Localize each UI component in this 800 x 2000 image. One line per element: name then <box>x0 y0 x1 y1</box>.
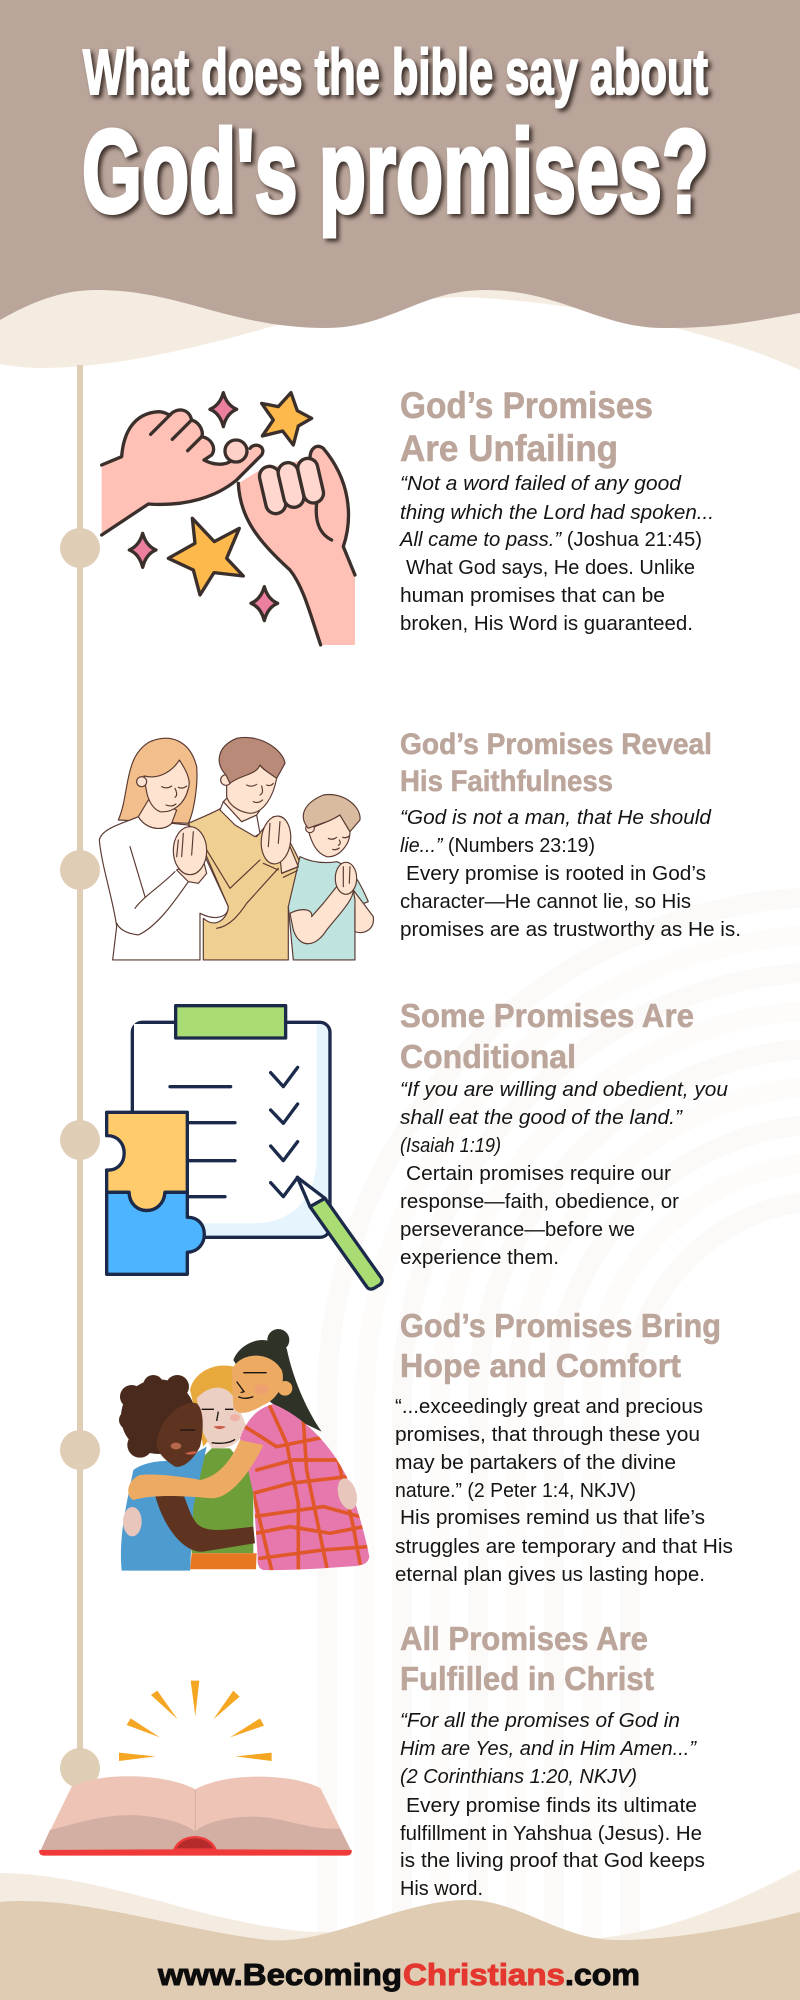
section 1 text: human promises that can be <box>400 585 665 607</box>
section 5 text: Every promise finds its ultimate <box>406 1795 697 1817</box>
section 3 text: perseverance—before we <box>400 1219 635 1241</box>
section 3 text: experience them. <box>400 1247 559 1269</box>
section 4 text <box>395 1307 733 1586</box>
section 2 text: Every promise is rooted in God’s <box>406 863 706 885</box>
footer website: Christians <box>403 1957 565 1992</box>
section 1 text <box>399 385 714 635</box>
section 4 text: nature.” (2 Peter 1:4, NKJV) <box>395 1480 636 1502</box>
section 5 text: (2 Corinthians 1:20, NKJV) <box>400 1766 637 1788</box>
section 4 text: struggles are temporary and that His <box>395 1536 733 1558</box>
section 2 text: lie...” (Numbers 23:19) <box>400 835 595 857</box>
section 5 text: His word. <box>400 1878 483 1900</box>
section 3 text <box>400 997 728 1269</box>
section 5 text: “For all the promises of God in <box>400 1710 680 1732</box>
section 1 text: What God says, He does. Unlike <box>406 557 695 579</box>
section 5 text <box>400 1620 705 1900</box>
section 3 text: Certain promises require our <box>406 1163 671 1185</box>
section 3 text: Some Promises Are <box>400 997 694 1034</box>
section 4 text: God’s Promises Bring <box>400 1307 721 1344</box>
section 5 text: Fulfilled in Christ <box>400 1660 654 1697</box>
icon: checklist and puzzle <box>107 1006 382 1289</box>
section 2 text: promises are as trustworthy as He is. <box>400 919 741 941</box>
section 4 text: may be partakers of the divine <box>395 1452 676 1474</box>
section 4 text: “...exceedingly great and precious <box>395 1396 703 1418</box>
section 5 text: is the living proof that God keeps <box>400 1850 705 1872</box>
section 4 text: eternal plan gives us lasting hope. <box>395 1564 705 1586</box>
section 1 text: thing which the Lord had spoken... <box>400 502 714 524</box>
section 2 text: His Faithfulness <box>400 765 613 798</box>
section 1 text: “Not a word failed of any good <box>400 473 682 495</box>
section 3 text: shall eat the good of the land.” <box>400 1107 683 1129</box>
title <box>82 36 709 238</box>
header band <box>0 0 800 370</box>
section 5 text: All Promises Are <box>400 1620 648 1657</box>
footer waves <box>0 1869 800 2000</box>
footer website: .com <box>565 1957 640 1992</box>
icon: praying family <box>99 737 373 960</box>
icon: pinky promise hands <box>102 393 355 645</box>
section 2 text: “God is not a man, that He should <box>400 807 712 829</box>
section 1 text: God’s Promises <box>400 385 653 426</box>
section 3 text: (Isaiah 1:19) <box>400 1135 501 1157</box>
footer website: www.Becoming <box>157 1957 402 1992</box>
section 4 text: promises, that through these you <box>395 1424 700 1446</box>
icon: three friends hugging <box>119 1329 369 1571</box>
section 2 text: God’s Promises Reveal <box>400 728 712 761</box>
section 4 text: Hope and Comfort <box>400 1347 681 1384</box>
section 3 text: Conditional <box>400 1038 576 1075</box>
section 1 text: All came to pass.” (Joshua 21:45) <box>399 529 702 551</box>
footer website <box>157 1957 640 1992</box>
section 1 text: Are Unfailing <box>400 428 618 469</box>
section 1 text: broken, His Word is guaranteed. <box>400 613 693 635</box>
section 4 text: His promises remind us that life’s <box>400 1507 705 1529</box>
section 5 text: Him are Yes, and in Him Amen...” <box>400 1738 697 1760</box>
icon: open book with rays <box>39 1681 352 1856</box>
section 3 text: “If you are willing and obedient, you <box>400 1079 728 1101</box>
timeline <box>60 365 100 1788</box>
section 2 text: character—He cannot lie, so His <box>400 891 691 913</box>
section 2 text <box>400 728 741 941</box>
section 5 text: fulfillment in Yahshua (Jesus). He <box>400 1823 702 1845</box>
section 3 text: response—faith, obedience, or <box>400 1191 679 1213</box>
